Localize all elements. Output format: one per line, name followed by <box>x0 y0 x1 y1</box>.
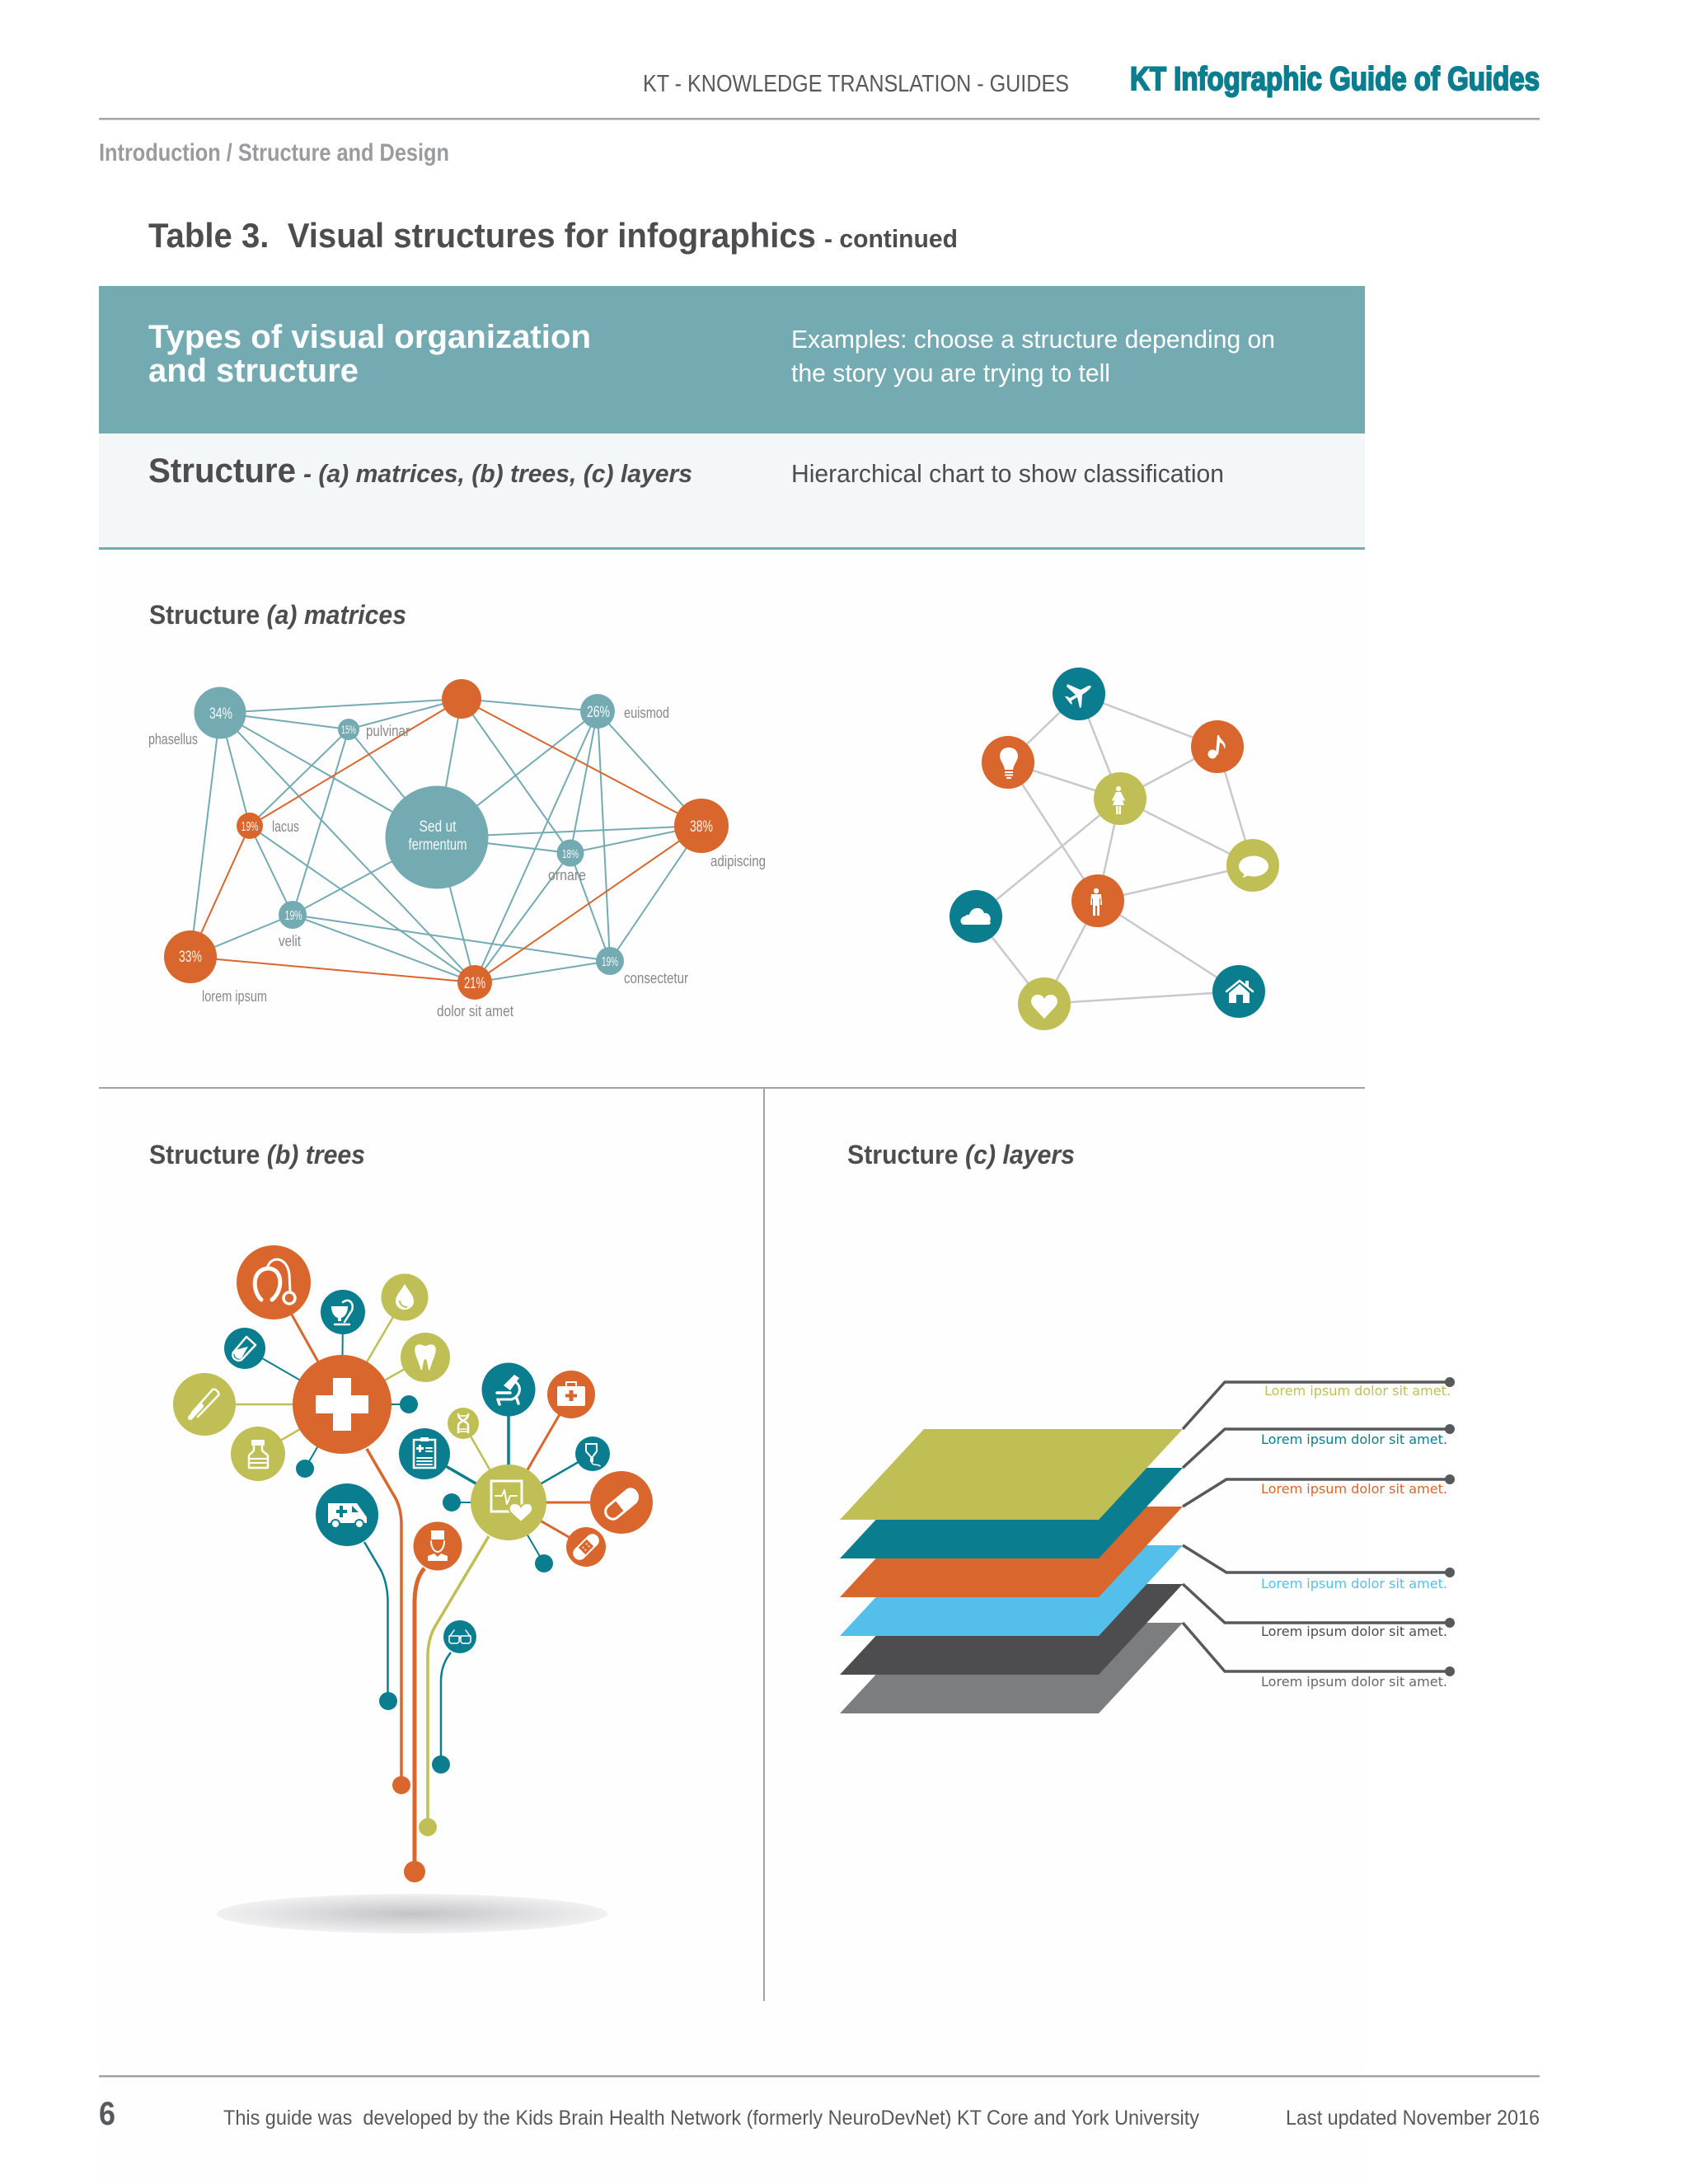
node labels: phasellus <box>148 731 198 748</box>
layer labels: Lorem ipsum dolor sit amet. <box>1261 1432 1447 1447</box>
icon: pill <box>590 1471 653 1534</box>
section breadcrumb: Introduction / Structure and Design <box>99 139 449 166</box>
table title: Table 3. Visual structures for infographics <box>148 216 816 255</box>
icon: tooth <box>401 1333 450 1382</box>
icon: medicine bottle <box>231 1427 285 1481</box>
header guide title: KT Infographic Guide of Guides <box>1130 61 1540 97</box>
table row: structure: - (a) matrices, (b) trees, (c) layers <box>303 459 692 488</box>
icon: heart monitor <box>471 1465 546 1540</box>
node values: 26% <box>587 704 610 721</box>
node values: 21% <box>464 975 485 992</box>
node values: fermentum <box>409 837 467 854</box>
column heading: examples: Examples: choose a structure depending on <box>791 325 1275 354</box>
icon: man <box>1071 874 1124 927</box>
node values: 19% <box>602 955 618 969</box>
page number: 6 <box>99 2096 115 2132</box>
icon: water drop <box>381 1274 429 1320</box>
header running title: KT - KNOWLEDGE TRANSLATION - GUIDES <box>643 71 1069 97</box>
icon: thermometer <box>173 1373 236 1436</box>
node values: 19% <box>241 820 259 834</box>
chart: percentage network matrix <box>148 679 766 1019</box>
page header <box>99 61 1540 166</box>
branches <box>204 1282 621 1872</box>
icon: woman <box>1094 772 1146 825</box>
icon: music note <box>1191 720 1244 773</box>
icon: cloud <box>950 890 1002 943</box>
node labels: lorem ipsum <box>202 988 267 1005</box>
ground shadow <box>217 1894 607 1933</box>
node labels: velit <box>279 933 301 949</box>
icon: light bulb <box>982 736 1034 789</box>
table title: - continued <box>824 224 958 253</box>
heading: structure a: Structure (a) matrices <box>149 600 406 630</box>
node labels <box>148 705 766 1019</box>
node values: 33% <box>179 949 202 966</box>
chart: icon network <box>950 668 1279 1030</box>
layer labels: Lorem ipsum dolor sit amet. <box>1261 1624 1447 1639</box>
terminal dots <box>296 1395 553 1882</box>
node values: 34% <box>209 705 232 723</box>
icon: microscope <box>481 1363 536 1416</box>
footer date: Last updated November 2016 <box>1286 2107 1540 2130</box>
node labels: consectetur <box>624 970 688 987</box>
node values: 38% <box>690 818 713 836</box>
layer labels: Lorem ipsum dolor sit amet. <box>1261 1576 1447 1591</box>
node labels: ornare <box>548 867 586 883</box>
layer labels: Lorem ipsum dolor sit amet. <box>1261 1481 1447 1497</box>
node values <box>179 704 713 992</box>
column heading: types: Types of visual organization <box>148 319 591 355</box>
icon: main cross <box>293 1355 392 1454</box>
icon: glasses <box>443 1620 476 1653</box>
icon: bowl of hygieia <box>321 1290 365 1334</box>
icon: dna <box>448 1408 479 1439</box>
layer labels <box>1261 1383 1451 1690</box>
icon: iv bag <box>575 1436 610 1471</box>
chart: medical tree <box>173 1245 653 1933</box>
leader lines <box>1183 1377 1455 1676</box>
layer labels: Lorem ipsum dolor sit amet. <box>1264 1383 1451 1399</box>
node values: 19% <box>285 909 302 923</box>
icon: bandage <box>566 1527 606 1567</box>
icon: ambulance <box>316 1483 378 1546</box>
icon: test tube <box>224 1328 265 1369</box>
heading: structure c: Structure (c) layers <box>847 1140 1075 1169</box>
node labels: pulvinar <box>366 723 410 739</box>
column heading: types: and structure <box>148 353 359 389</box>
node labels: euismod <box>624 705 669 721</box>
heading: structure b: Structure (b) trees <box>149 1140 365 1169</box>
table row: structure <box>99 434 1365 550</box>
table header band <box>99 286 1365 434</box>
node values: 15% <box>341 723 356 736</box>
column heading: types <box>148 319 591 389</box>
icon: house <box>1212 965 1265 1018</box>
icon: airplane <box>1053 668 1105 720</box>
node labels: lacus <box>272 818 299 835</box>
icon: speech bubble <box>1226 839 1279 892</box>
chart: stacked layers <box>840 1377 1455 1713</box>
icon: nurse <box>414 1521 462 1571</box>
icon: heart <box>1018 977 1071 1030</box>
node labels: adipiscing <box>710 853 766 869</box>
column heading: examples: the story you are trying to tell <box>791 359 1110 387</box>
table row: structure: Hierarchical chart to show classification <box>791 459 1224 488</box>
node values: Sed ut <box>419 818 457 836</box>
node values: 18% <box>562 847 579 861</box>
footer credit: This guide was developed by the Kids Brain Health Network (formerly NeuroDevNet) KT Core and York University <box>223 2107 1199 2130</box>
column heading: examples <box>791 325 1275 387</box>
page footer <box>99 2075 1540 2132</box>
icon: clipboard <box>399 1428 450 1479</box>
layer labels: Lorem ipsum dolor sit amet. <box>1261 1674 1447 1690</box>
table row: structure: Structure <box>148 451 296 490</box>
node labels: dolor sit amet <box>437 1003 513 1019</box>
icon: first aid kit <box>547 1371 595 1418</box>
icon: stethoscope <box>237 1245 311 1319</box>
